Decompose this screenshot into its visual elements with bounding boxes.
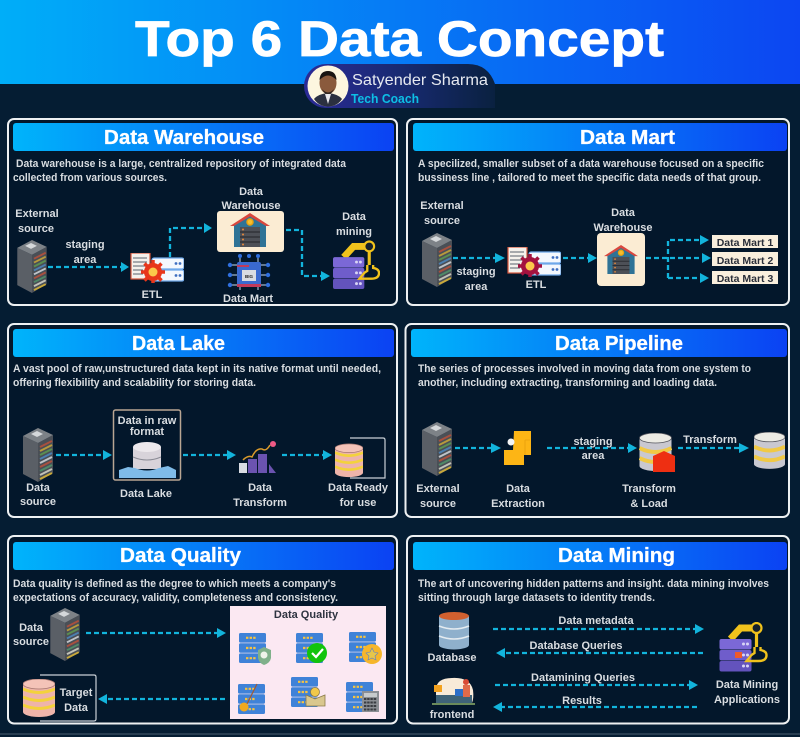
label: data mining [336,211,372,238]
label: external source [420,200,464,227]
description: Data warehouse is a large, centralized repository of integrated data [16,158,347,170]
icon: extraction [504,431,531,465]
icon: validity [296,633,327,663]
label: data ready [328,482,389,509]
label: staging area: area [465,281,488,293]
label: data source: Data [19,622,44,634]
label: data warehouse: Data [611,207,636,219]
arrow: staging area [547,443,637,453]
icon: warehouse [604,245,638,274]
description: Data quality is defined as the degree to which meets a company's [13,578,336,590]
label: data source [13,622,49,648]
arrow: transform to ready [282,450,332,460]
label: transform and load [622,483,676,510]
arrow: source to extraction [455,443,501,453]
label: data source: Data [26,482,51,494]
arrow: results [493,702,697,712]
panel: Data Pipeline [406,324,789,517]
arrow: ETL to warehouse [563,253,597,263]
arrow: staging area [48,262,129,272]
label: ETL: ETL [526,279,547,291]
arrow: transform [678,443,749,453]
icon: security [239,633,271,665]
label: staging area: staging [65,239,105,251]
label: transform and load: Transform [622,483,676,495]
label: data warehouse: Warehouse [222,200,280,212]
label: target data [60,687,93,714]
icon: lake cylinder [119,442,176,478]
description: sitting through large datasets to identity trends. [418,592,655,604]
title: Top 6 Data Concept [135,11,664,67]
header banner [0,0,800,84]
label: results: Results [562,695,602,707]
icon: target database [754,432,785,469]
label: database: Database [428,652,476,664]
label: frontend: frontend [430,709,474,721]
heading bar [411,329,787,357]
label: data lake: Data Lake [120,488,172,500]
heading: Data Mining [558,545,675,567]
panel: Data Mining [407,536,789,724]
description [418,158,764,184]
quality dimensions box: Data Quality [274,609,339,621]
label: data source: source [13,636,49,648]
icon: author photo [308,66,348,106]
arrow: database queries [496,648,703,658]
tag: data mart 2: Data Mart 2 [717,255,773,267]
quality dimensions box [230,606,386,719]
description: The series of processes involved in moving data from one system to [418,363,751,375]
label: ETL: ETL [142,289,163,301]
icon: server [23,428,53,482]
description: A specilized, smaller subset of a data warehouse focused on a specific [418,158,764,170]
label: data transform: Data [248,482,273,494]
description: bussiness line , tailored to meet the specific data needs of that group. [418,172,761,184]
label: external source: source [18,223,54,235]
label: data extraction: Data [506,483,531,495]
arrow: staging area [453,253,505,263]
tag: data mart 3: Data Mart 3 [717,273,773,285]
icon: warehouse [230,213,270,247]
icon: ETL [508,247,561,278]
heading bar [13,329,394,357]
label: transform: Transform [683,434,737,446]
heading bar [13,542,394,570]
label: staging area [65,239,105,266]
tag: data mart 1: Data Mart 1 [717,237,773,249]
author name: Satyender Sharma [352,72,488,89]
label: data transform: Transform [233,497,287,509]
icon: server [50,608,80,661]
arrow: data metadata [493,624,704,634]
icon: cleaning [238,684,265,714]
label: target data: Data [64,702,89,714]
icon: database [439,612,469,650]
panel: Data Quality [8,536,397,724]
heading: Data Warehouse [104,127,264,149]
warehouse box [217,211,284,252]
author badge [304,64,495,108]
label: staging area: area [74,254,97,266]
description [13,578,338,604]
heading bar [413,123,787,151]
icon: big data chip [228,254,270,290]
label: data warehouse [594,207,652,234]
label: staging area: staging [456,266,496,278]
icon: data mining application [720,623,766,672]
label: data mining applications [714,679,780,706]
label: staging area: staging [573,436,613,448]
heading: Data Quality [120,545,242,567]
icon: knowledge [291,677,325,707]
icon: ETL [131,253,184,284]
label: data extraction: Extraction [491,498,545,510]
icon: target data [23,675,96,721]
description: another, including extracting, transforming and loading data. [418,377,717,389]
data lake box [114,410,180,480]
description: The art of uncovering hidden patterns and insight. data mining involves [418,578,769,590]
icon: calculator [346,682,379,712]
label: database queries: Database Queries [530,640,622,652]
icon: big data chip: BIG [245,274,253,279]
icon: frontend [432,678,475,705]
label: external source: External [416,483,460,495]
panel: Data Mart [407,119,789,305]
data lake box: Data in raw [118,415,177,427]
label: staging area [573,436,613,462]
label: staging area [456,266,496,293]
label: external source: External [420,200,464,212]
label: datamining queries: Datamining Queries [531,672,635,684]
icon: server [17,240,47,293]
label: data mining applications: Applications [714,694,780,706]
description: offering flexibility and scalability for storing data. [13,377,256,389]
label: external source: External [15,208,59,220]
description: expectations of accuracy, validity, completeness and consistency. [13,592,338,604]
icon: transform and load [640,433,675,472]
data lake box: format [130,426,164,438]
warehouse box [597,233,645,286]
label: data warehouse: Warehouse [594,222,652,234]
icon: transform chart [239,441,276,473]
arrow: warehouse to mining [286,230,330,281]
icon: data mining [333,242,379,289]
label: target data: Target [60,687,93,699]
heading: Data Pipeline [555,333,683,355]
label: external source [416,483,460,510]
heading: Data Mart [580,127,675,149]
label: data ready: Data Ready [328,482,389,494]
label: external source: source [424,215,460,227]
label: data warehouse: Data [239,186,264,198]
label: data metadata: Data metadata [558,615,634,627]
arrow: quality to target [98,694,225,704]
heading bar [413,542,787,570]
label: transform and load: & Load [630,498,668,510]
label: data transform [233,482,287,509]
arrow: source to lake [56,450,112,460]
description: collected from various sources. [13,172,167,184]
heading: Data Lake [132,333,225,355]
label: external source [15,208,59,235]
icon: server [422,233,452,287]
label: data mining applications: Data Mining [716,679,778,691]
tag: data mart 2 [712,252,778,267]
label: external source: source [420,498,456,510]
label: staging area: area [582,450,605,462]
description [418,363,751,389]
description [13,363,381,389]
label: data mining: Data [342,211,367,223]
icon: rating [349,632,382,664]
arrow: ETL to warehouse [170,223,212,257]
label: data mining: mining [336,226,372,238]
label: data warehouse [222,186,280,212]
author role: Tech Coach [351,91,419,106]
description [418,578,769,604]
description: A vast pool of raw,unstructured data kept in its native format until needed, [13,363,381,375]
heading bar [13,123,394,151]
arrow: datamining queries [495,680,698,690]
label: data source [20,482,56,508]
icon: data ready [335,438,385,478]
label: data mart: Data Mart [223,293,273,305]
label: data extraction [491,483,545,510]
label: data source: source [20,496,56,508]
arrow: lake to transform [183,450,236,460]
panel: Data Lake [8,324,397,517]
icon: server [422,422,452,476]
description [13,158,347,184]
panel: Data Warehouse [8,119,397,305]
arrow: source to quality [86,628,226,638]
arrows: warehouse to data marts [646,235,711,283]
label: data ready: for use [340,497,376,509]
